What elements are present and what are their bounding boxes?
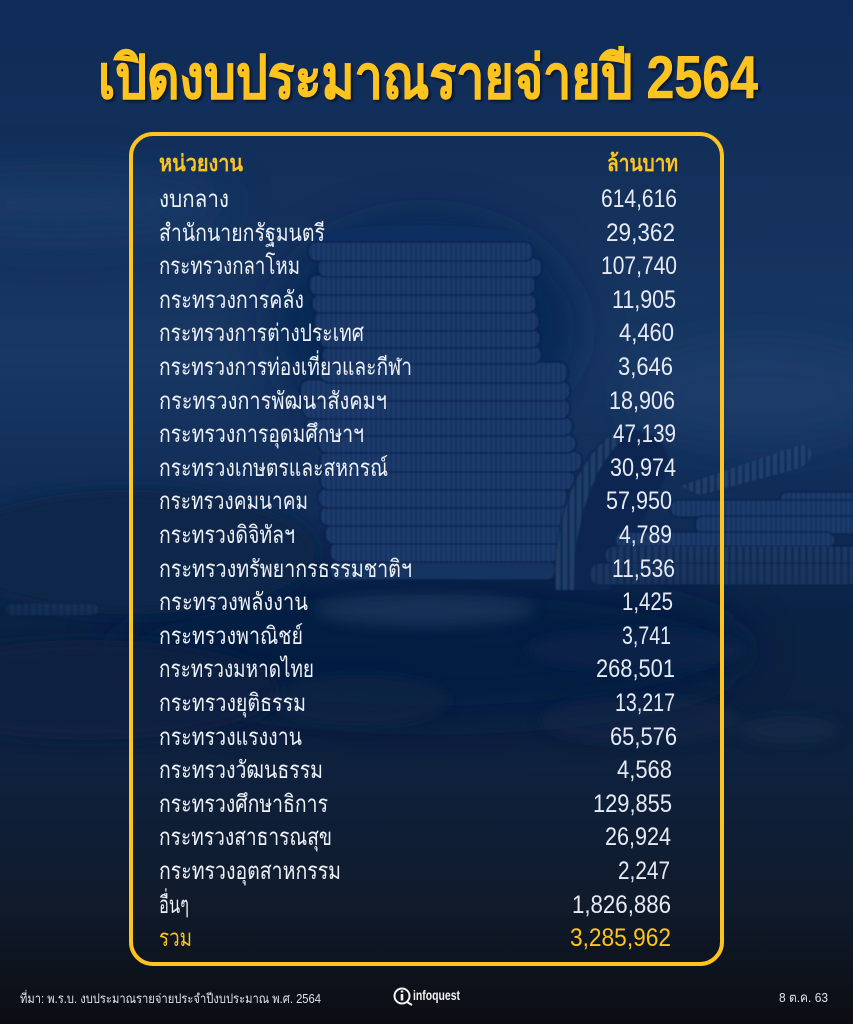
row labels: agencies: งบกลาง (159, 186, 229, 213)
row values: million baht (570, 185, 677, 952)
row labels: agencies: กระทรวงมหาดไทย (159, 655, 314, 683)
row values: million baht: 2,247 (618, 857, 670, 885)
row labels: agencies: กระทรวงพาณิชย์ (159, 622, 303, 650)
row values: million baht: 614,616 (601, 185, 677, 213)
panel border (131, 134, 722, 964)
source note: ที่มา: พ.ร.บ. งบประมาณรายจ่ายประจำปีงบประมาณ พ.ศ. 2564 (20, 990, 321, 1006)
row values: million baht: 3,741 (622, 622, 671, 650)
row values: million baht: 1,425 (622, 588, 673, 616)
row labels: agencies: อื่นๆ (159, 888, 189, 919)
row labels: agencies: กระทรวงเกษตรและสหกรณ์ (159, 454, 388, 482)
row labels: agencies: กระทรวงการคลัง (159, 287, 304, 314)
background photo: stacked coins (0, 175, 853, 744)
coin on the left (0, 490, 315, 740)
row labels: agencies: กระทรวงการต่างประเทศ (159, 320, 364, 347)
row labels: agencies: กระทรวงพลังงาน (159, 589, 308, 616)
row values: million baht: 65,576 (610, 723, 677, 751)
row values: million baht: 1,826,886 (572, 891, 671, 919)
row values: million baht: 3,646 (618, 353, 673, 381)
row labels: agencies: กระทรวงศึกษาธิการ (159, 791, 328, 818)
row labels: agencies: รวม (159, 925, 192, 952)
row values: million baht: 3,285,962 (570, 924, 671, 952)
main coin stack (300, 225, 582, 580)
table header (159, 150, 678, 176)
row labels: agencies: กระทรวงการท่องเที่ยวและกีฬา (159, 350, 412, 381)
row labels: agencies: กระทรวงอุตสาหกรรม (159, 858, 341, 886)
table header: หน่วยงาน (159, 150, 243, 176)
icon: magnifier with i (394, 988, 412, 1005)
row labels: agencies: กระทรวงคมนาคม (159, 488, 308, 515)
row labels: agencies: กระทรวงกลาโหม (159, 252, 300, 280)
row labels: agencies: กระทรวงการอุดมศึกษาฯ (159, 421, 364, 449)
row labels: agencies (159, 186, 412, 952)
row labels: agencies: กระทรวงวัฒนธรรม (159, 757, 323, 784)
leaning coin (555, 430, 668, 590)
row values: million baht: 11,536 (612, 555, 675, 583)
row values: million baht: 4,460 (619, 319, 674, 347)
row labels: agencies: สำนักนายกรัฐมนตรี (159, 220, 325, 247)
row values: million baht: 268,501 (596, 655, 675, 683)
row labels: agencies: กระทรวงทรัพยากรธรรมชาติฯ (159, 556, 412, 583)
row labels: agencies: กระทรวงแรงงาน (159, 724, 302, 751)
row labels: agencies: กระทรวงยุติธรรม (159, 690, 306, 718)
logo: infoquest (394, 987, 460, 1005)
row values: million baht: 30,974 (610, 454, 676, 482)
date: 8 ต.ค. 63 (779, 990, 828, 1005)
table header: ล้านบาท (607, 150, 678, 176)
row values: million baht: 13,217 (615, 689, 675, 717)
row values: million baht: 11,905 (612, 286, 676, 314)
row labels: agencies: กระทรวงการพัฒนาสังคมฯ (159, 388, 387, 415)
row labels: agencies: กระทรวงสาธารณสุข (159, 824, 332, 852)
row values: million baht: 4,568 (617, 756, 672, 784)
row values: million baht: 47,139 (613, 420, 676, 448)
blurred foreground coins (270, 594, 840, 744)
logo: infoquest: infoquest (413, 987, 460, 1003)
row values: million baht: 129,855 (593, 790, 672, 818)
row values: million baht: 57,950 (606, 487, 672, 515)
row values: million baht: 18,906 (609, 387, 675, 415)
row values: million baht: 29,362 (606, 219, 675, 247)
row values: million baht: 26,924 (605, 823, 671, 851)
row values: million baht: 107,740 (601, 252, 677, 280)
panel: budget table (131, 134, 722, 964)
row labels: agencies: กระทรวงดิจิทัลฯ (159, 522, 295, 549)
coin pile on the right (590, 445, 853, 585)
row values: million baht: 4,789 (619, 521, 672, 549)
